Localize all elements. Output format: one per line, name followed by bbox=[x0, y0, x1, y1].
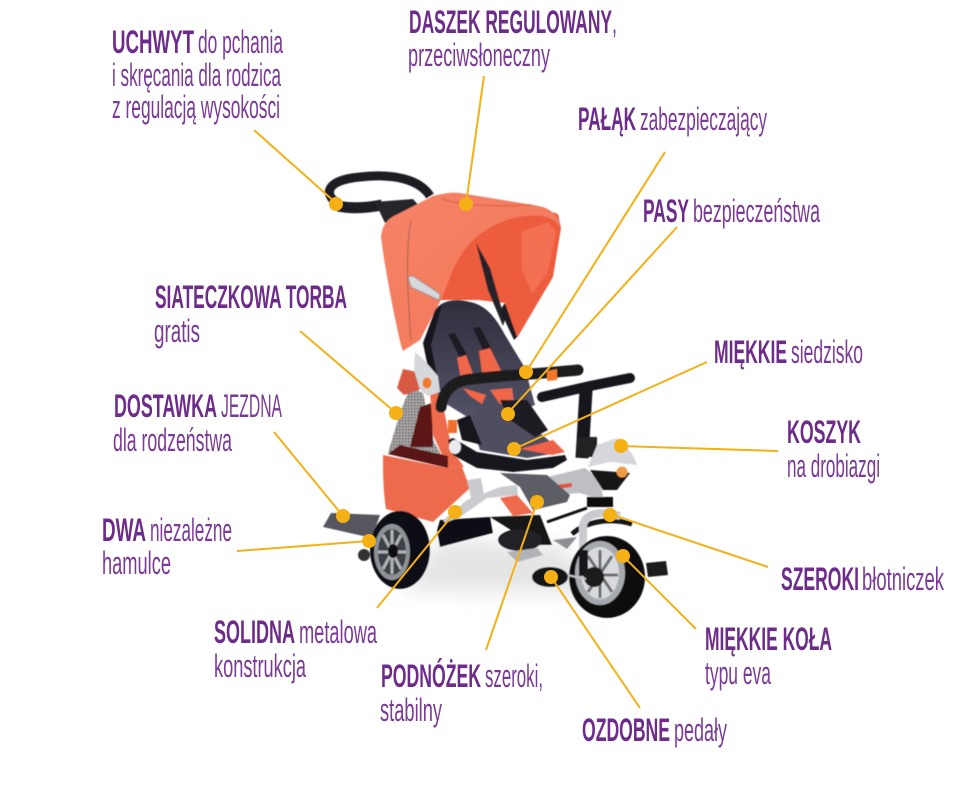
label: koszyk bbox=[787, 414, 880, 484]
pointer: uchwyt bbox=[254, 130, 343, 211]
pointer: koszyk bbox=[614, 439, 778, 453]
illustration: tricycle stroller bbox=[323, 176, 668, 618]
label: solidna konstrukcja bbox=[214, 614, 377, 684]
pointer: miękkie siedzisko bbox=[507, 362, 707, 456]
label: daszek: przeciwsłoneczny bbox=[408, 37, 550, 73]
label: dwa hamulce: DWA bbox=[102, 512, 146, 548]
label: podnóżek: PODNÓŻEK bbox=[381, 658, 481, 694]
label: pasy bbox=[643, 193, 820, 229]
footboard bbox=[323, 513, 380, 538]
push handle bbox=[329, 176, 430, 223]
label: podnóżek: szeroki, bbox=[485, 658, 543, 694]
front wheel bbox=[567, 536, 645, 618]
label: daszek: DASZEK REGULOWANY bbox=[409, 4, 612, 40]
label: solidna konstrukcja: konstrukcja bbox=[214, 648, 306, 684]
pointer lines and dots bbox=[237, 76, 778, 708]
label: ozdobne pedały: pedały bbox=[674, 712, 727, 748]
pointer: siateczkowa torba bbox=[300, 331, 403, 420]
pointer: koła bbox=[616, 549, 696, 629]
pointer: konstrukcja bbox=[377, 505, 462, 608]
pedals bbox=[532, 561, 668, 587]
label: daszek: , bbox=[612, 4, 617, 40]
label: dostawka bbox=[113, 388, 282, 458]
label: dostawka: DOSTAWKA bbox=[114, 388, 217, 424]
pointer: błotniczek bbox=[603, 508, 768, 567]
label: miękkie siedzisko: siedzisko bbox=[791, 334, 863, 370]
label: uchwyt: z regulacją wysokości bbox=[112, 89, 280, 125]
label: pałąk: zabezpieczający bbox=[640, 101, 767, 137]
pointer: hamulce bbox=[237, 534, 376, 551]
label: miękkie koła: typu eva bbox=[705, 655, 771, 691]
label: dostawka: dla rodzeństwa bbox=[113, 422, 232, 458]
label: daszek bbox=[408, 4, 617, 73]
seat tray bbox=[448, 438, 567, 472]
label: ozdobne pedały: OZDOBNE bbox=[582, 712, 670, 748]
label: solidna konstrukcja: SOLIDNA bbox=[214, 614, 295, 650]
label: szeroki błotniczek: SZEROKI bbox=[781, 561, 859, 597]
label: podnóżek: stabilny bbox=[380, 692, 442, 728]
label: uchwyt bbox=[112, 24, 283, 125]
label: uchwyt: i skręcania dla rodzica bbox=[112, 57, 281, 93]
label: pałąk bbox=[578, 101, 767, 137]
silver frame bbox=[443, 468, 603, 523]
pointer: dostawka bbox=[274, 432, 350, 523]
label: koszyk: na drobiazgi bbox=[787, 448, 880, 484]
seat back bbox=[414, 300, 535, 425]
pointer: pasy bbox=[501, 227, 677, 421]
canopy inner bbox=[440, 208, 561, 338]
label: dwa hamulce: niezależne bbox=[150, 512, 232, 548]
label: pałąk: PAŁĄK bbox=[578, 101, 636, 137]
front frame and handlebar bbox=[542, 378, 632, 552]
label: dwa hamulce bbox=[102, 512, 232, 581]
ground shadow bbox=[400, 540, 625, 612]
orange basket bbox=[383, 455, 470, 522]
label: solidna konstrukcja: metalowa bbox=[299, 614, 377, 650]
pointer: pałąk bbox=[519, 152, 665, 379]
pointer: podnóżek bbox=[486, 495, 544, 650]
toy basket bbox=[588, 438, 637, 490]
brake bbox=[358, 549, 370, 561]
label: siateczkowa torba: gratis bbox=[154, 313, 200, 349]
rear wheel bbox=[370, 511, 430, 589]
canopy latch bbox=[408, 276, 440, 300]
safety bar bbox=[441, 369, 578, 407]
chassis bbox=[437, 508, 587, 562]
footrest bbox=[500, 473, 570, 510]
seat cushion bbox=[448, 400, 565, 458]
mesh bag bbox=[388, 369, 464, 468]
label: dwa hamulce: hamulce bbox=[102, 545, 171, 581]
label: uchwyt: do pchania bbox=[198, 24, 283, 60]
label: miękkie koła bbox=[705, 621, 832, 691]
canopy bbox=[381, 193, 561, 351]
label: koszyk: KOSZYK bbox=[787, 414, 861, 450]
label: pasy: bezpieczeństwa bbox=[693, 193, 820, 229]
label: pasy: PASY bbox=[643, 193, 689, 229]
label: uchwyt: UCHWYT bbox=[112, 24, 194, 60]
pointer: pedały bbox=[544, 570, 640, 708]
canopy outer bbox=[381, 193, 561, 351]
text: JEZDNA bbox=[221, 388, 282, 424]
label: podnóżek bbox=[380, 658, 543, 728]
label: miękkie koła: MIĘKKIE KOŁA bbox=[705, 621, 832, 657]
label: siateczkowa torba bbox=[154, 279, 347, 349]
label: siateczkowa torba: SIATECZKOWA TORBA bbox=[155, 279, 347, 315]
label: miękkie siedzisko: MIĘKKIE bbox=[714, 334, 787, 370]
pointer: daszek bbox=[459, 76, 484, 211]
